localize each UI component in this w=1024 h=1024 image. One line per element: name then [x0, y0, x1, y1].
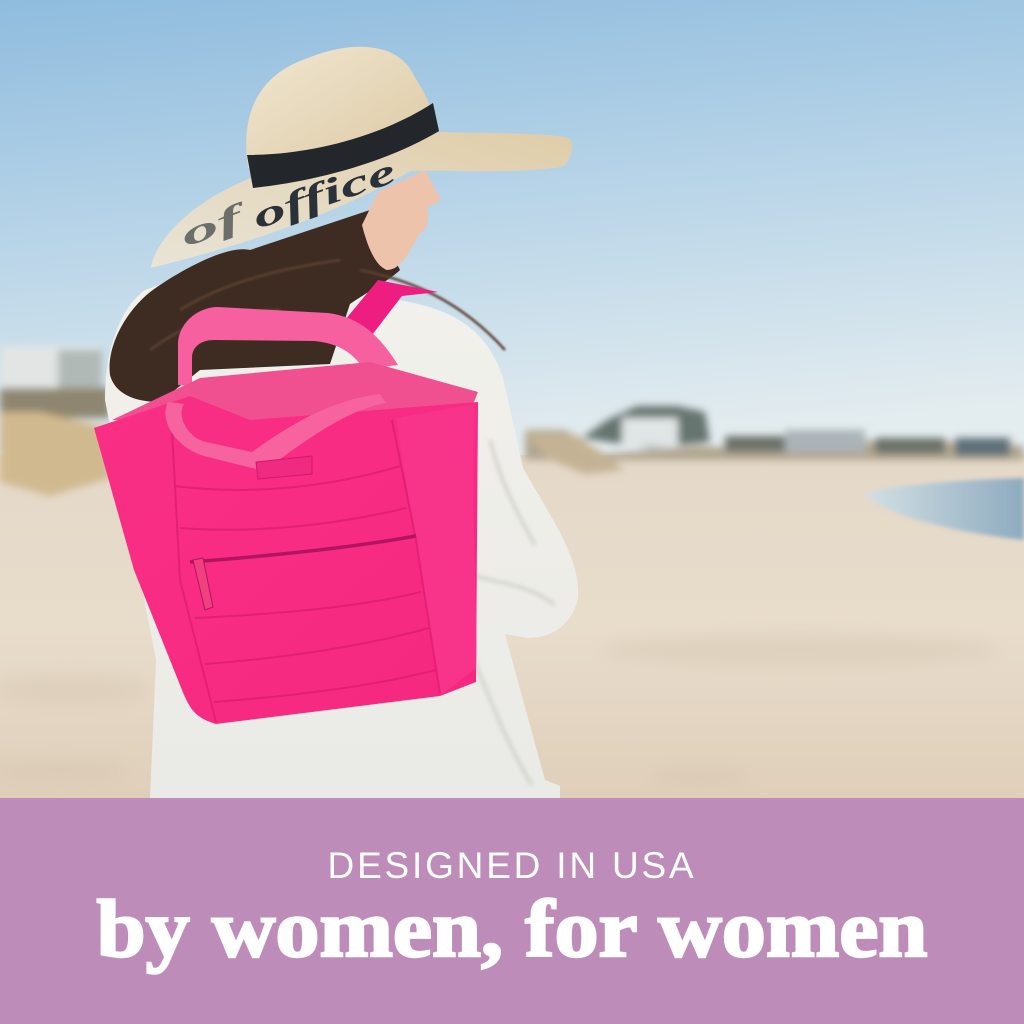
loose hair strands: [150, 260, 505, 350]
banner headline: by women, for women: [97, 883, 927, 974]
beach photo illustration: [0, 0, 1024, 798]
hat lettering: of: [176, 196, 255, 255]
banner: [0, 798, 1024, 1024]
hat lettering: [176, 151, 401, 255]
hat band: [247, 103, 439, 188]
distant shoreline houses: [525, 406, 1024, 474]
front handle: [165, 394, 386, 471]
woman: [105, 170, 578, 798]
sand texture: [0, 634, 1000, 783]
water: [864, 478, 1024, 540]
hat brim: [151, 132, 572, 268]
hat lettering: office: [248, 151, 401, 237]
zipper: [190, 536, 416, 562]
shirt folds: [470, 440, 555, 785]
hat crown: [246, 47, 436, 168]
pink tote bag: [94, 307, 478, 724]
back handle: [178, 307, 398, 386]
left dunes and houses: [0, 346, 110, 496]
bag body: [94, 396, 478, 724]
bag inner: [112, 362, 478, 425]
shirt body and sleeve: [105, 258, 578, 798]
sky: [0, 0, 1024, 480]
face: [362, 170, 441, 270]
backpack strap: [345, 280, 438, 335]
banner subtitle: DESIGNED IN USA: [328, 845, 696, 886]
quilting lines: [172, 420, 440, 722]
hat: [151, 47, 572, 268]
hair: [110, 210, 400, 402]
sand: [0, 455, 1024, 800]
handle patch: [256, 456, 312, 479]
